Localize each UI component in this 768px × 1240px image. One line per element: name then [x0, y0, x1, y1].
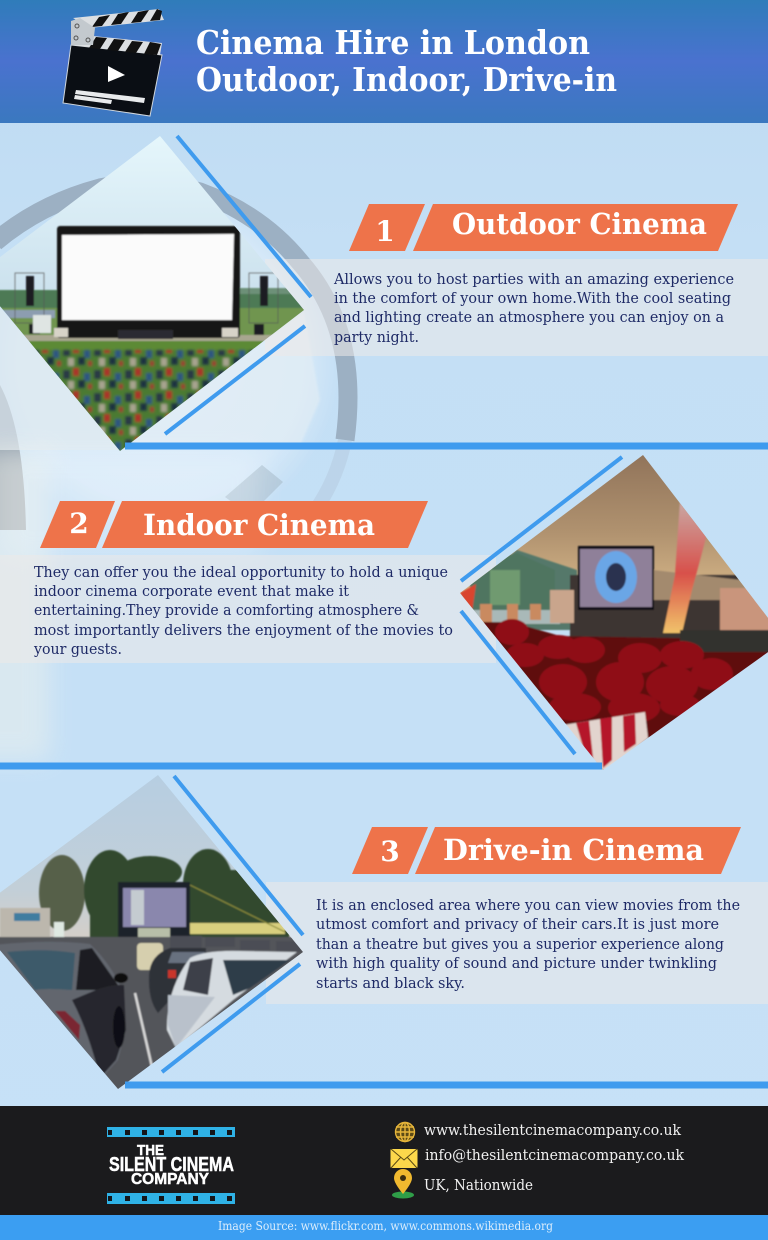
- icon: envelope: [390, 1149, 418, 1168]
- logo: the silent cinema company: [107, 1127, 235, 1204]
- background decoration: film reel and popcorn: [0, 180, 348, 760]
- logo: the silent cinema company: SILENT CINEMA: [109, 1154, 234, 1176]
- panel: drive-in cinema text background: [266, 882, 768, 1004]
- text: drive-in cinema description: [316, 896, 740, 992]
- badge: number 2: [40, 501, 115, 548]
- text: indoor cinema description: They can offer you the ideal opportunity to hold a unique: [34, 563, 448, 581]
- badge: number 2: 2: [69, 507, 89, 540]
- text: drive-in cinema description: utmost comfort and privacy of their cars.It is just more: [316, 915, 719, 933]
- text: outdoor cinema description: party night.: [334, 328, 419, 346]
- title: Cinema Hire in London: [196, 23, 590, 62]
- text: drive-in cinema description: with high quality of sound and picture under twinkling: [316, 954, 717, 972]
- heading: indoor cinema: Indoor Cinema: [143, 508, 375, 542]
- decorative blue lines: outdoor: [125, 136, 768, 446]
- logo: the silent cinema company: THE: [137, 1142, 164, 1159]
- heading: outdoor cinema: Outdoor Cinema: [452, 207, 707, 241]
- contact details: [424, 1121, 685, 1194]
- photo: drive-in cinema with parked cars: [0, 770, 310, 1097]
- icon: location pin: [392, 1169, 414, 1198]
- heading: indoor cinema: [102, 501, 428, 548]
- image source credit: Image Source: www.flickr.com, www.commons.wikimedia.org: [218, 1219, 553, 1233]
- title: Outdoor, Indoor, Drive-in: [196, 60, 617, 99]
- heading: outdoor cinema: [413, 204, 738, 251]
- contact details: www.thesilentcinemacompany.co.uk: [424, 1121, 682, 1139]
- text: indoor cinema description: [33, 563, 453, 658]
- heading: drive-in cinema: Drive-in Cinema: [443, 833, 704, 867]
- panel: indoor cinema text background: [0, 555, 496, 663]
- text: outdoor cinema description: [333, 270, 734, 346]
- text: outdoor cinema description: and lighting create an atmosphere you can enjoy on a: [334, 308, 724, 326]
- decorative blue lines: indoor: [0, 457, 622, 766]
- badge: number 3: 3: [380, 835, 400, 868]
- text: indoor cinema description: indoor cinema corporate event that make it: [34, 582, 349, 600]
- footer band: [0, 1106, 768, 1215]
- photo: outdoor cinema screen and crowd: [0, 130, 310, 456]
- contact details: info@thesilentcinemacompany.co.uk: [425, 1146, 685, 1164]
- text: outdoor cinema description: in the comfort of your own home.With the cool seating: [334, 289, 731, 307]
- photo: indoor cinema with red beanbags: [455, 450, 768, 775]
- panel: outdoor cinema text background: [265, 259, 768, 356]
- contact details: UK, Nationwide: [424, 1176, 533, 1194]
- heading: drive-in cinema: [415, 827, 741, 874]
- logo: the silent cinema company: COMPANY: [131, 1171, 209, 1188]
- badge: number 1: [349, 204, 425, 251]
- icon: globe: [395, 1122, 415, 1142]
- text: indoor cinema description: entertaining.They provide a comforting atmosphere &: [34, 601, 419, 619]
- text: indoor cinema description: most importantly delivers the enjoyment of the movies to: [34, 621, 453, 639]
- badge: number 3: [352, 827, 428, 874]
- text: drive-in cinema description: starts and black sky.: [316, 974, 465, 992]
- source bar: [0, 1215, 768, 1240]
- header band: [0, 0, 768, 123]
- text: indoor cinema description: your guests.: [33, 640, 122, 658]
- decorative blue lines: drive-in: [125, 776, 768, 1085]
- text: drive-in cinema description: than a theatre but gives you a superior experience along: [316, 935, 724, 953]
- text: outdoor cinema description: Allows you to host parties with an amazing experience: [333, 270, 734, 288]
- text: drive-in cinema description: It is an enclosed area where you can view movies from the: [316, 896, 740, 914]
- title: [196, 23, 617, 99]
- badge: number 1: 1: [375, 215, 395, 248]
- icon: clapperboard: [63, 9, 164, 116]
